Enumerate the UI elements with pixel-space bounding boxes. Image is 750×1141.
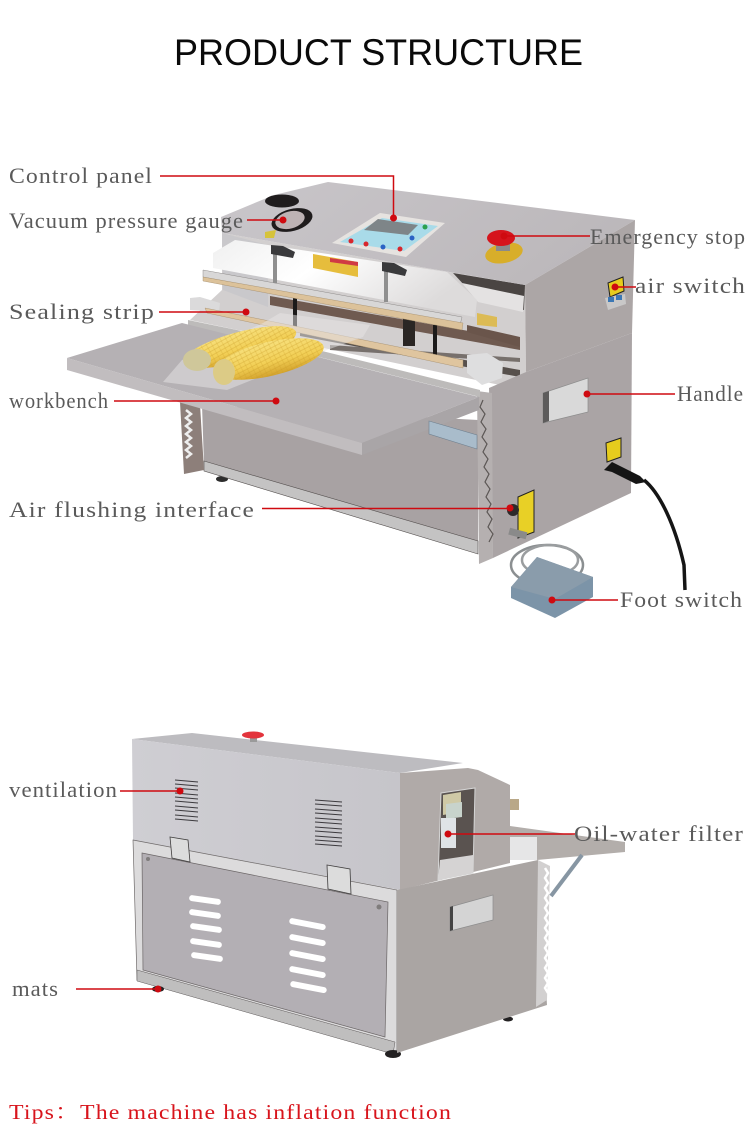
- label: sealing strip: Sealing strip: [9, 299, 155, 324]
- panel screws: [146, 857, 382, 910]
- label: workbench: workbench: [9, 388, 109, 413]
- vacuum bag: [163, 313, 370, 390]
- air flushing sticker and ports: [507, 490, 534, 539]
- label: ventilation: ventilation: [9, 777, 118, 802]
- label: handle: [584, 381, 744, 406]
- lower rear frame: [133, 840, 397, 1053]
- label: foot switch: Foot switch: [620, 587, 743, 612]
- rear workbench: [510, 826, 625, 860]
- label: oil-water filter: [444, 821, 744, 846]
- foot switch: [511, 545, 593, 618]
- label: workbench: [9, 388, 280, 413]
- lower rear panel: [142, 853, 388, 1037]
- support arm: [551, 855, 582, 896]
- air switch: [605, 277, 626, 310]
- label: vacuum pressure gauge: Vacuum pressure gauge: [9, 208, 244, 233]
- rear galvanized bar: [137, 970, 395, 1054]
- label: sealing strip: [9, 299, 250, 324]
- emergency stop button: [483, 230, 525, 267]
- label: air flushing interface: Air flushing interface: [9, 497, 255, 522]
- machine: front view: [67, 182, 685, 618]
- label: mats: mats: [12, 976, 59, 1001]
- label: emergency stop: Emergency stop: [590, 224, 746, 249]
- label: ventilation: [9, 777, 184, 802]
- label: handle: Handle: [677, 381, 744, 406]
- power socket label: [606, 438, 621, 462]
- ventilation slots: left: [189, 895, 223, 962]
- tips note: Tips：The machine has inflation function: [9, 1100, 452, 1124]
- label: emergency stop: [500, 224, 746, 249]
- rear feet: [152, 986, 513, 1058]
- label: control panel: Control panel: [9, 163, 153, 188]
- rear red stop button: [242, 732, 264, 742]
- inflation connector: [510, 799, 519, 810]
- upper sealing head: [203, 240, 477, 330]
- lower sealing strip: [188, 297, 503, 397]
- interior behind lid: [190, 233, 526, 385]
- control panel: [332, 213, 445, 257]
- support arm: [429, 421, 477, 449]
- lower body side: [489, 333, 632, 558]
- lower side panel: [397, 860, 547, 1053]
- power plug and cord: [604, 462, 685, 590]
- rear edge strip: [536, 860, 550, 1007]
- label: foot switch: [548, 587, 743, 612]
- side handle: [450, 895, 493, 931]
- machine: rear view: [132, 732, 625, 1058]
- rear upper panel: [132, 739, 400, 890]
- lower body front: [202, 405, 478, 545]
- handle: [543, 378, 588, 423]
- galvanized base bar: [204, 461, 478, 554]
- right vent grille: [315, 800, 342, 846]
- lid top panel: [221, 182, 635, 285]
- vacuum pressure gauge: [265, 194, 315, 238]
- label: oil-water filter: Oil-water filter: [574, 821, 744, 846]
- label: air switch: air switch: [635, 273, 746, 298]
- label: control panel: [9, 163, 397, 222]
- label: air flushing interface: [9, 497, 514, 522]
- left vent grille: [175, 780, 198, 821]
- front edge strip: [477, 391, 493, 564]
- hinges: [170, 837, 351, 894]
- ventilation slots: right: [289, 918, 327, 994]
- corn cobs: [180, 317, 327, 388]
- foot: [216, 476, 228, 482]
- workbench: [67, 323, 479, 455]
- rear top face: [132, 733, 463, 773]
- oil-water filter window: [438, 788, 475, 880]
- title: PRODUCT STRUCTURE: [174, 32, 583, 73]
- left notched bracket: [180, 402, 204, 474]
- upper side panel: [400, 768, 510, 890]
- lid side panel: [525, 220, 635, 372]
- label: mats: [12, 976, 162, 1001]
